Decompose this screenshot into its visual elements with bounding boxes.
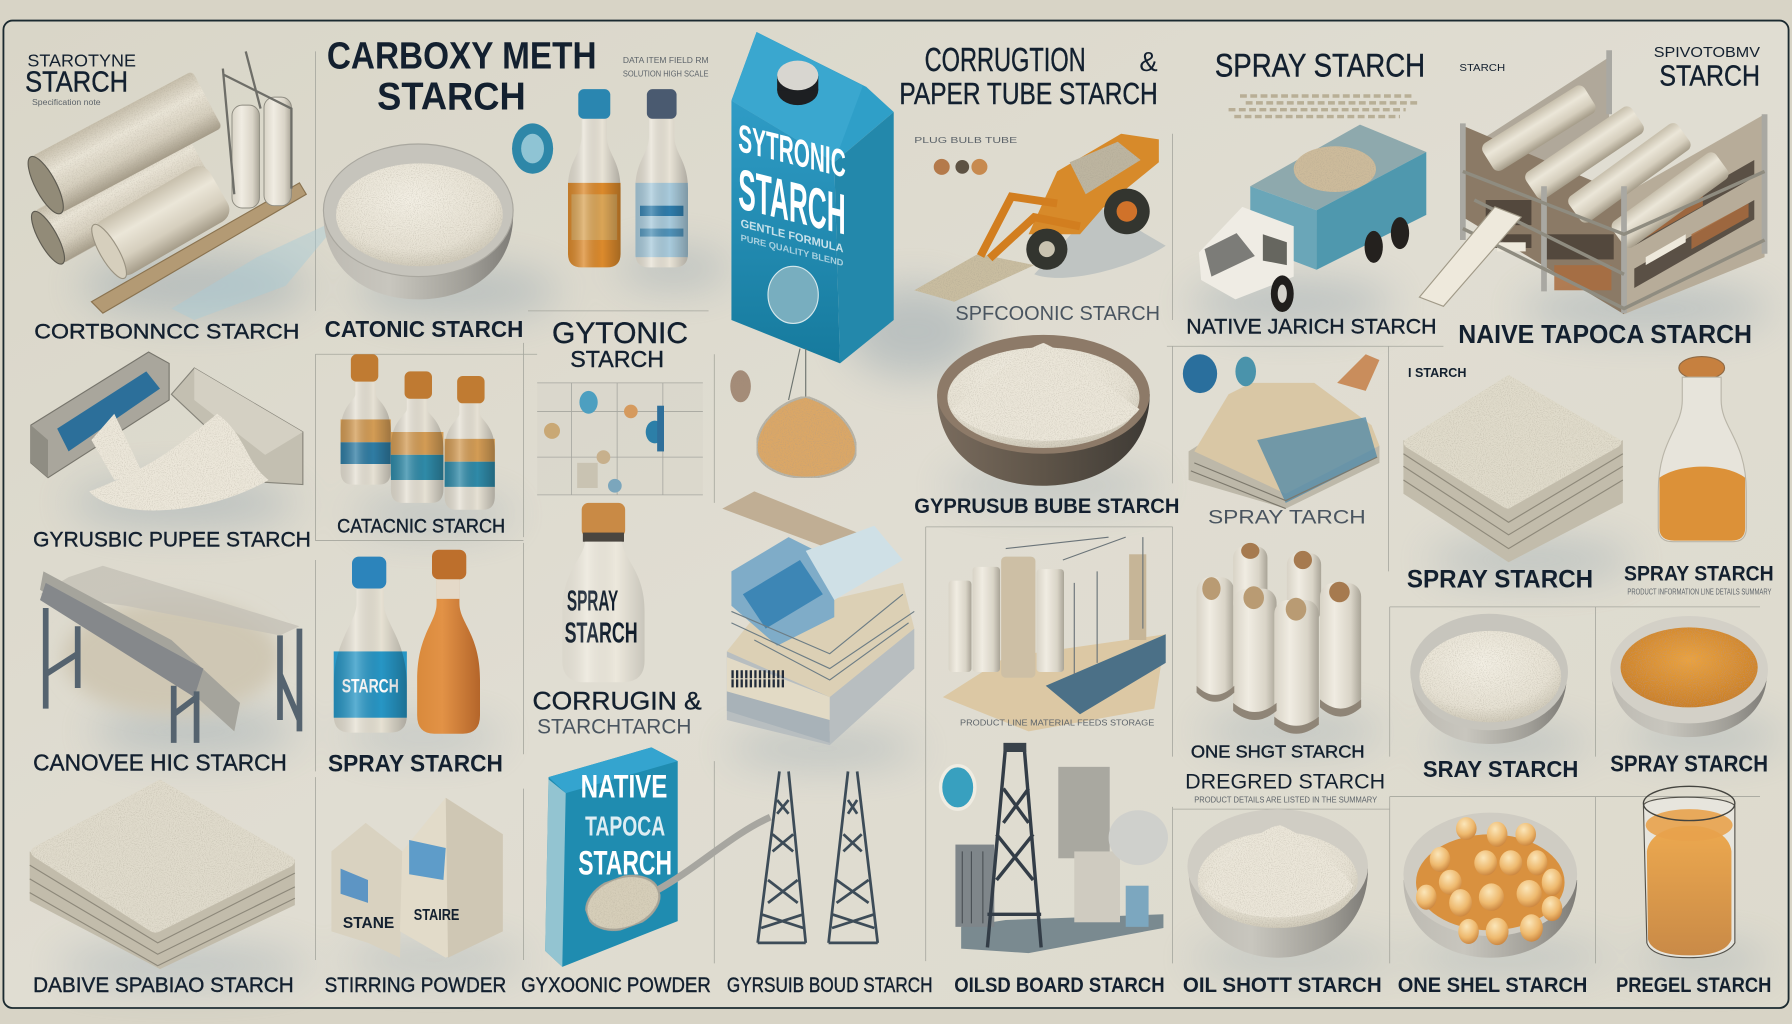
heading: carboxy meth starch — [327, 35, 709, 119]
heading: starch top-left: STAROTYNE — [27, 50, 136, 70]
towels: lower stack — [30, 779, 295, 969]
heading: starch top-right — [1459, 45, 1760, 93]
spoon — [579, 817, 770, 939]
bottle: blue label — [635, 89, 688, 267]
machine: orange loader — [914, 134, 1166, 302]
bottle: spray starch white: SPRAY — [567, 585, 618, 617]
milk carton: sytronic starch: STARCH — [738, 157, 846, 248]
labels: row three: SRAY STARCH — [1423, 756, 1578, 782]
labels: row one: NAIVE TAPOCA STARCH — [1458, 319, 1752, 349]
carton cap — [777, 61, 818, 105]
labels: row two middle: SPRAY TARCH — [1208, 506, 1366, 528]
icon: blue badge — [512, 123, 553, 174]
rack: roll drying frame — [1419, 50, 1765, 314]
labels: row two middle: CATACNIC STARCH — [337, 516, 505, 538]
bags: paper sachets: STANE — [343, 915, 395, 932]
bowl: carboxy powder — [323, 144, 513, 299]
carton title: SYTRONIC — [738, 116, 846, 187]
bowl: spray white — [1410, 614, 1568, 744]
panel dividers — [315, 51, 1760, 963]
heading: carboxy meth starch: SOLUTION HIGH SCALE — [623, 70, 709, 79]
labels: row one: CORTBONNCC STARCH — [34, 318, 299, 343]
wooden base — [91, 183, 306, 313]
labels: row two middle: GYPRUSUB BUBE STARCH — [914, 493, 1179, 518]
bottle: orange label — [568, 89, 621, 267]
carton label oval — [768, 266, 818, 323]
heading: starch top-right: STARCH — [1659, 61, 1760, 93]
bottle: glass with orange liquid — [1658, 357, 1746, 542]
label: corrugin & starch: CORRUGIN & — [533, 688, 702, 716]
labels: bottom row: ONE SHEL STARCH — [1398, 972, 1587, 997]
glass: pregel starch — [1643, 786, 1735, 958]
bottle: spray starch white — [562, 503, 645, 682]
label: corrugin & starch: STARCHTARCH — [537, 714, 691, 739]
labels: bottom row: STIRRING POWDER — [325, 972, 506, 997]
bottle: orange — [417, 550, 480, 734]
labels: row one: CATONIC STARCH — [325, 316, 523, 342]
towels: upper stack — [1403, 366, 1623, 562]
chart: gytonic diagram panel — [537, 383, 703, 495]
stack: papers with blue cover — [1183, 354, 1379, 509]
heading: corrugation paper tube starch: PAPER TUBE STARCH — [899, 76, 1158, 111]
refinery: oil plant — [941, 743, 1168, 953]
heading: spray starch — [1215, 48, 1425, 117]
bags: paper sachets — [331, 798, 503, 958]
heading: spray starch: SPRAY STARCH — [1215, 48, 1425, 84]
heading: corrugation paper tube starch: CORRUGTION — [925, 42, 1086, 79]
heading: carboxy meth starch: STARCH — [377, 76, 526, 119]
machine: sheet feeder — [31, 352, 303, 510]
heading: carboxy meth starch: DATA ITEM FIELD RM — [623, 56, 709, 65]
heading: starch top-left: Specification note — [32, 98, 101, 107]
bottle: spray starch white: STARCH — [565, 617, 638, 649]
heading: starch top-left: STARCH — [25, 66, 128, 98]
box: native tapoca starch with spoon: NATIVE — [581, 769, 667, 805]
carton title: PURE QUALITY BLEND — [741, 233, 844, 268]
carton title: GENTLE FORMULA — [741, 217, 844, 256]
bowl: beans — [1403, 813, 1577, 958]
bottle: blue cap: STARCH — [342, 676, 399, 698]
labels: row two right — [1407, 561, 1774, 596]
truck: blue container — [1199, 125, 1426, 312]
labels: bottom row: OIL SHOTT STARCH — [1183, 972, 1382, 997]
labels: row three: CANOVEE HIC STARCH — [33, 749, 287, 775]
label: corrugin & starch — [533, 688, 702, 739]
labels: row one: SPFCOONIC STARCH — [955, 302, 1160, 325]
white cylinder — [86, 161, 234, 283]
heading: corrugation paper tube starch: & — [1139, 46, 1158, 77]
bottle: blue cap — [334, 557, 407, 733]
box: native tapoca starch with spoon: TAPOCA — [585, 810, 665, 841]
labels: row one — [34, 302, 1752, 372]
labels: row three — [33, 742, 1768, 804]
towers: twin lattice — [758, 771, 878, 943]
machine: conveyor table — [40, 566, 299, 743]
labels: row three: SPRAY STARCH — [328, 750, 503, 777]
heading: starch top-right: SPIVOTOBMV — [1654, 45, 1760, 61]
bowl: large dark rim powder — [937, 335, 1150, 486]
heading: corrugation paper tube starch: PLUG BULB TUBE — [914, 136, 1017, 145]
bowl: oil shot powder — [1187, 809, 1368, 958]
labels: bottom row: GYRSUIB BOUD STARCH — [727, 972, 933, 997]
blue sheet — [171, 217, 343, 320]
box: native tapoca starch with spoon — [545, 747, 770, 967]
labels: bottom row: GYXOONIC POWDER — [521, 972, 711, 997]
labels: row three: DREGRED STARCH — [1185, 769, 1385, 794]
heading: corrugation paper tube starch — [899, 42, 1158, 145]
bowl: orange grains — [1610, 616, 1768, 737]
carton title — [738, 116, 846, 269]
towels: upper stack: I STARCH — [1408, 366, 1466, 380]
rack uprights — [223, 51, 291, 208]
labels: bottom row: DABIVE SPABIAO STARCH — [33, 972, 294, 997]
roll rear — [26, 129, 212, 268]
factory: silos — [943, 537, 1166, 731]
labels: bottom row: OILSD BOARD STARCH — [954, 972, 1165, 997]
roll top — [22, 71, 222, 218]
soft shadows — [57, 250, 1783, 984]
labels: row two right: SPRAY STARCH — [1624, 561, 1774, 586]
labels: row three: ONE SHGT STARCH — [1191, 742, 1365, 762]
labels: bottom row — [33, 972, 1771, 997]
bags: paper sachets: STAIRE — [414, 907, 460, 924]
labels: row one: GYTONIC — [552, 317, 688, 350]
cylinders: five paper tubes — [1197, 543, 1361, 734]
box: native tapoca starch with spoon: STARCH — [578, 844, 672, 882]
factory: silos: PRODUCT LINE MATERIAL FEEDS STORAGE — [960, 719, 1154, 728]
labels: row two middle: GYRUSBIC PUPEE STARCH — [33, 526, 311, 551]
labels: row three: PRODUCT DETAILS ARE LISTED IN THE SUMMARY — [1194, 795, 1378, 804]
labels: row one: STARCH — [570, 346, 664, 372]
heading: starch top-right: STARCH — [1459, 63, 1505, 74]
labels: row one: NATIVE JARICH STARCH — [1186, 314, 1437, 339]
bottles: three orange cap — [341, 354, 391, 485]
labels: row two middle — [33, 493, 1366, 551]
spoon with orange powder — [730, 349, 856, 478]
item: fabric rolls on rack — [22, 51, 343, 320]
labels: row three: SPRAY STARCH — [1610, 750, 1768, 776]
labels: row two right: SPRAY STARCH — [1407, 565, 1593, 593]
milk carton: sytronic starch — [731, 32, 894, 363]
heading: starch top-left — [25, 50, 136, 107]
building: isometric factory — [722, 491, 914, 745]
heading: carboxy meth starch: CARBOXY METH — [327, 35, 597, 77]
bottles: spray pair — [334, 550, 480, 734]
